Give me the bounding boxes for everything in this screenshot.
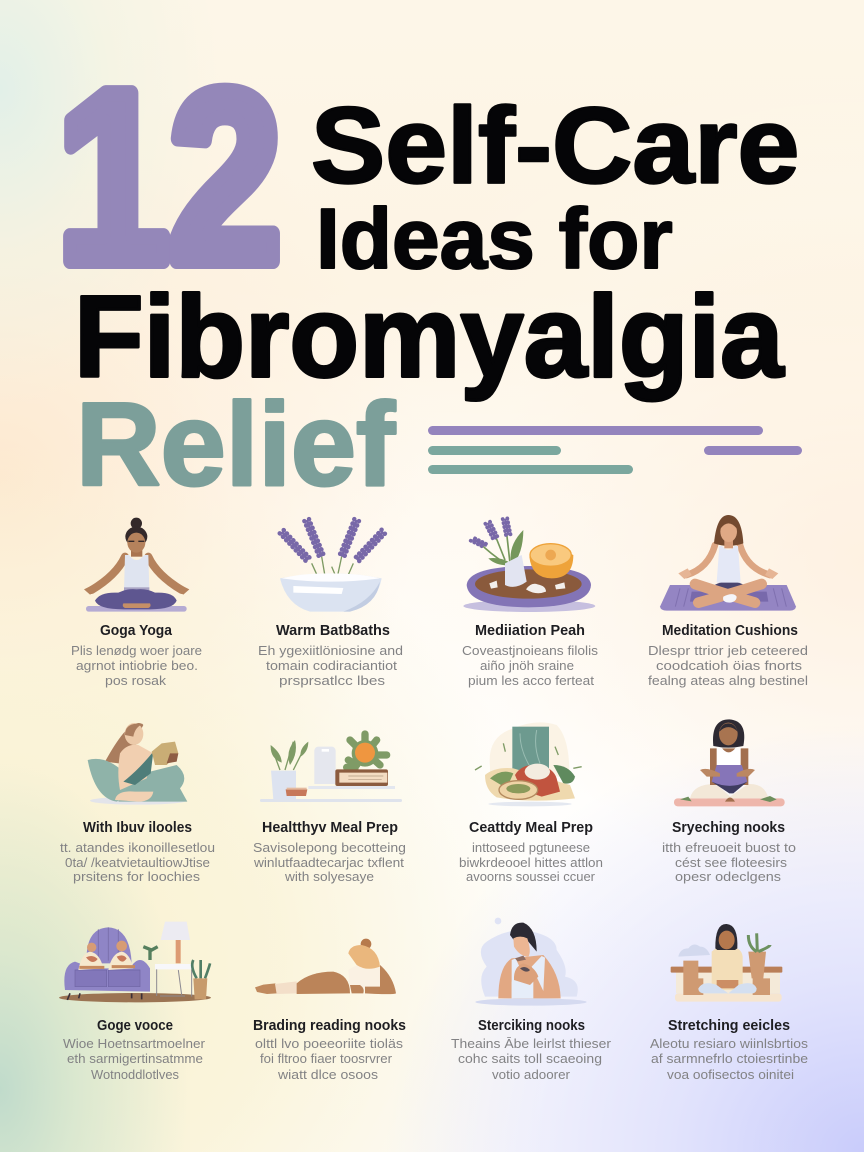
description: foi fltroo fiaer toosrvrer — [260, 1051, 393, 1066]
description: Eh ygexiitlöniosine and — [258, 643, 403, 658]
description — [253, 840, 406, 884]
description: opesr odeclgens — [675, 869, 782, 884]
icon: lavender bath bowl — [280, 519, 385, 612]
description: prsitens for loochies — [73, 869, 201, 884]
description: pos rosak — [105, 673, 167, 688]
description: Dlespr ttrior jeb ceteered — [648, 643, 808, 658]
description — [60, 840, 215, 884]
heading: Goga Yoga — [100, 623, 173, 639]
item 9: Goge Vooce — [63, 1018, 206, 1082]
heading: Stretching eeicles — [668, 1018, 790, 1034]
description: itth efreuoeit buost to — [662, 840, 796, 855]
icon: couple on purple sofa with lamp — [59, 922, 211, 1002]
description — [650, 1036, 809, 1082]
heading: Meditation Cushions — [662, 623, 798, 639]
description: votio adoorer — [492, 1067, 571, 1082]
item 3: Meditation Peah — [462, 623, 599, 688]
item 8: Sryeching nooks — [662, 820, 796, 884]
description: coodcatioh öias fnorts — [656, 658, 803, 673]
title line: Relief: Relief — [76, 379, 396, 510]
item 2: Warm Baths — [258, 623, 403, 688]
description: biwkrdeooel hittes attlon — [459, 855, 603, 870]
description: olttl lvo poeeoriite tioläs — [255, 1036, 404, 1051]
description — [63, 1036, 206, 1082]
decorative title bars — [428, 426, 802, 474]
description: Plis lenødg woer joare — [71, 643, 202, 658]
description: Aleotu resiaro wiinlsbrtios — [650, 1036, 809, 1051]
description — [459, 840, 603, 884]
item 7: Ceattdy Meal Prep — [459, 820, 603, 884]
description — [451, 1036, 612, 1082]
description: with solyesaye — [284, 869, 374, 884]
description — [662, 840, 796, 884]
icon: woman with aroma steam — [475, 918, 587, 1006]
title — [57, 41, 799, 510]
icon: woman lying on side — [255, 939, 396, 994]
heading: Brading reading nooks — [253, 1018, 406, 1034]
heading: Warm Batb8aths — [276, 623, 390, 639]
description: 0ta/ /keatvietaultiowJtise — [65, 855, 210, 870]
title numeral 12: 12 — [57, 41, 281, 313]
description: wiatt dlce osoos — [277, 1067, 379, 1082]
description: voa oofisectos oinitei — [667, 1067, 794, 1082]
description: aiño jnöh sraine — [480, 658, 574, 673]
icon: seated woman on floor mat — [674, 719, 785, 806]
description: Wioe Hoetnsartmoelner — [63, 1036, 206, 1051]
description: winlutfaadtecarjac txflent — [253, 855, 404, 870]
description: Wotnoddlotlves — [91, 1067, 179, 1082]
item 10: Brading reading nooks — [253, 1018, 406, 1082]
item 11: Sterching nooks — [451, 1018, 612, 1082]
icon: healthy meal plate — [475, 722, 582, 806]
icon: plant, jar, book and orange — [260, 734, 402, 802]
description: tt. atandes ikonoillesetlou — [60, 840, 215, 855]
description: Savisolepong becotteing — [253, 840, 406, 855]
description: af sarmnefrlo ctoiesrtinbe — [651, 1051, 808, 1066]
description — [648, 643, 808, 688]
heading: Goge vooce — [97, 1018, 173, 1034]
description: tomain codiraciantiot — [266, 658, 397, 673]
heading: With Ibuv ilooles — [83, 820, 192, 836]
description — [462, 643, 599, 688]
description: agrnot intiobrie beo. — [76, 658, 198, 673]
item 6: Healthy Meal Prep — [253, 820, 406, 884]
description: eth sarmigertinsatmme — [67, 1051, 203, 1066]
item 12: Stretching eeicles — [650, 1018, 809, 1082]
icon: seated woman at bench with plant — [671, 924, 782, 1002]
description: fealng ateas alng bestinel — [648, 673, 808, 688]
description — [255, 1036, 404, 1082]
heading: Ceattdy Meal Prep — [469, 820, 593, 836]
icon: aromatherapy dish with citrus — [463, 518, 595, 612]
description — [71, 643, 202, 688]
description: pium les acco ferteat — [468, 673, 594, 688]
heading: Sterciking nooks — [478, 1018, 585, 1034]
title line: Fibromyalgia: Fibromyalgia — [74, 273, 785, 402]
heading: Mediiation Peah — [475, 623, 585, 639]
title line: Ideas for: Ideas for — [316, 192, 673, 287]
heading: Sryeching nooks — [672, 820, 785, 836]
heading: Healtthyv Meal Prep — [262, 820, 398, 836]
icon: seated yoga woman — [84, 518, 189, 612]
description: cohc saits toll scaeoing — [458, 1051, 602, 1066]
title line: Self-Care: Self-Care — [311, 86, 799, 206]
icon: woman reading on cushions — [88, 723, 187, 805]
item 4: Meditation Cushions — [648, 623, 808, 688]
description — [258, 643, 403, 688]
item 5: With Ibuv Iooles — [60, 820, 215, 884]
item 1: Goga Yoga — [71, 623, 202, 688]
description: prsprsatlcc lbes — [279, 673, 386, 688]
description: Coveastjnoieans filolis — [462, 643, 599, 658]
description: cést see floteesirs — [675, 855, 788, 870]
description: avoorns soussei ccuer — [466, 869, 596, 884]
description: Theains Ābe leirlst thieser — [451, 1036, 612, 1051]
icon: meditating woman on mat — [660, 515, 796, 611]
description: inttoseed pgtuneese — [472, 840, 590, 855]
